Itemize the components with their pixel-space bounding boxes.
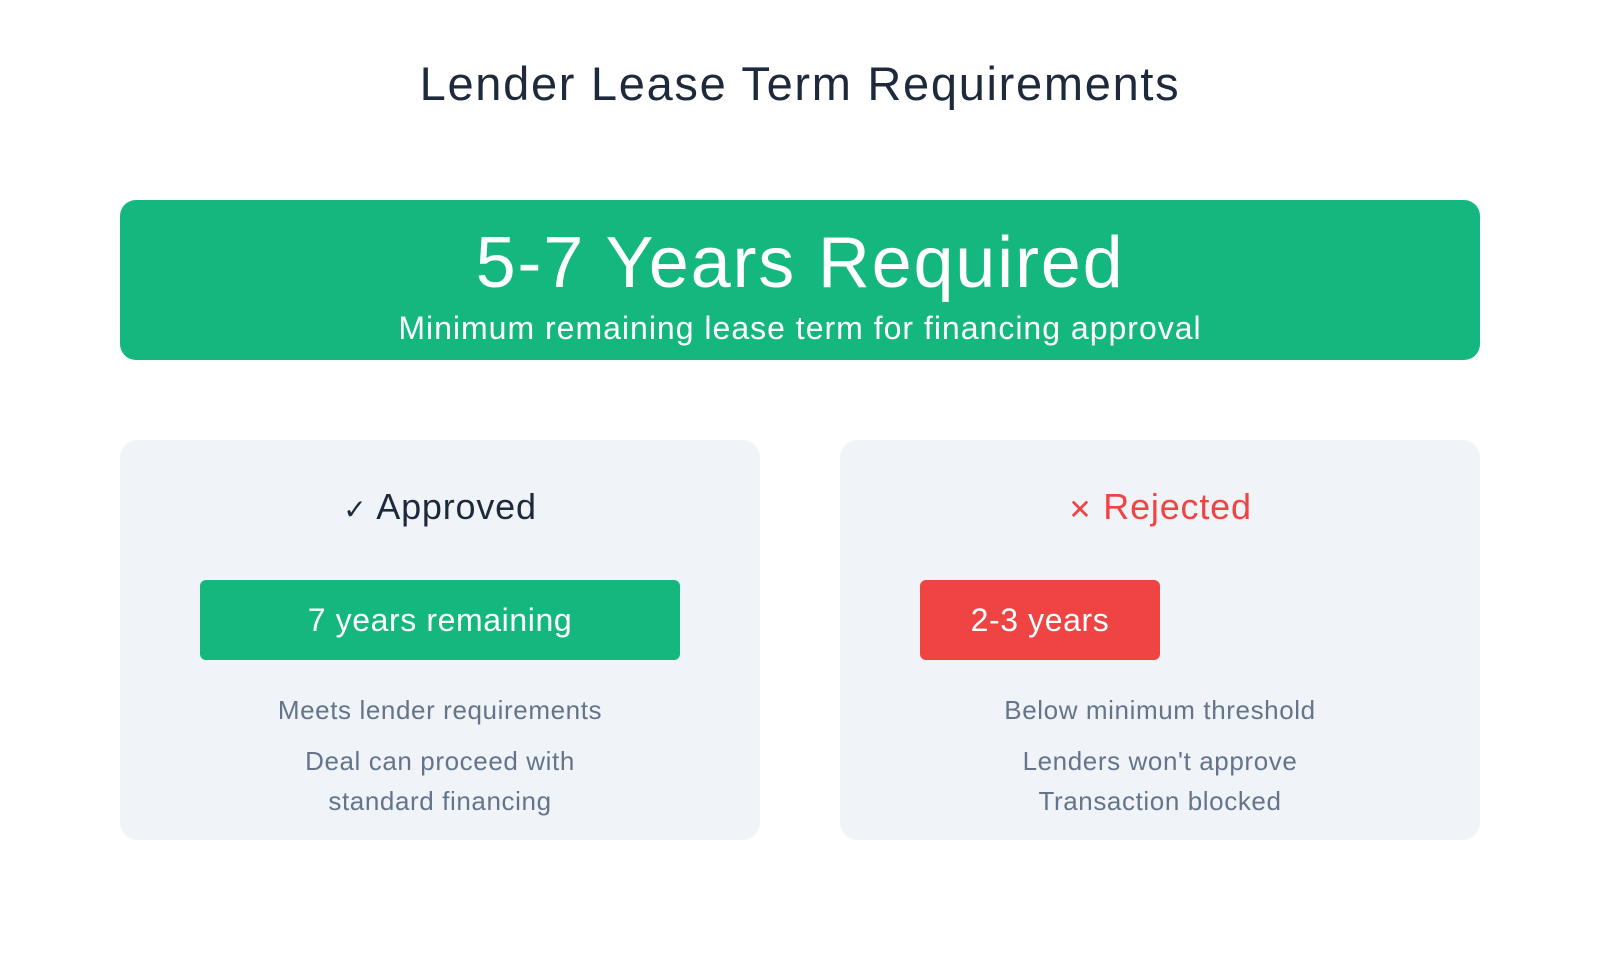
rejected heading: ✕ Rejected — [1068, 486, 1252, 527]
rejected description: Below minimum threshold — [1004, 695, 1316, 725]
approved detail: Deal can proceed with — [305, 746, 575, 776]
green badge: 7 years remaining — [308, 602, 572, 638]
approved description: Meets lender requirements — [278, 695, 602, 725]
rejected detail — [1023, 746, 1297, 816]
banner subtitle: Minimum remaining lease term for financing approval — [398, 310, 1202, 346]
title: Lender Lease Term Requirements — [420, 57, 1180, 110]
red badge: 2-3 years — [971, 602, 1109, 638]
banner heading: 5-7 Years Required — [476, 223, 1124, 303]
panel: rejected — [840, 440, 1480, 840]
rejected detail: Lenders won't approve — [1023, 746, 1297, 776]
approved detail — [305, 746, 575, 816]
green badge — [200, 580, 680, 660]
banner — [120, 200, 1480, 360]
approved heading: ✓ Approved — [343, 486, 537, 527]
rejected detail: Transaction blocked — [1038, 786, 1282, 816]
approved detail: standard financing — [328, 786, 552, 816]
red badge — [920, 580, 1160, 660]
panel: approved — [120, 440, 760, 840]
